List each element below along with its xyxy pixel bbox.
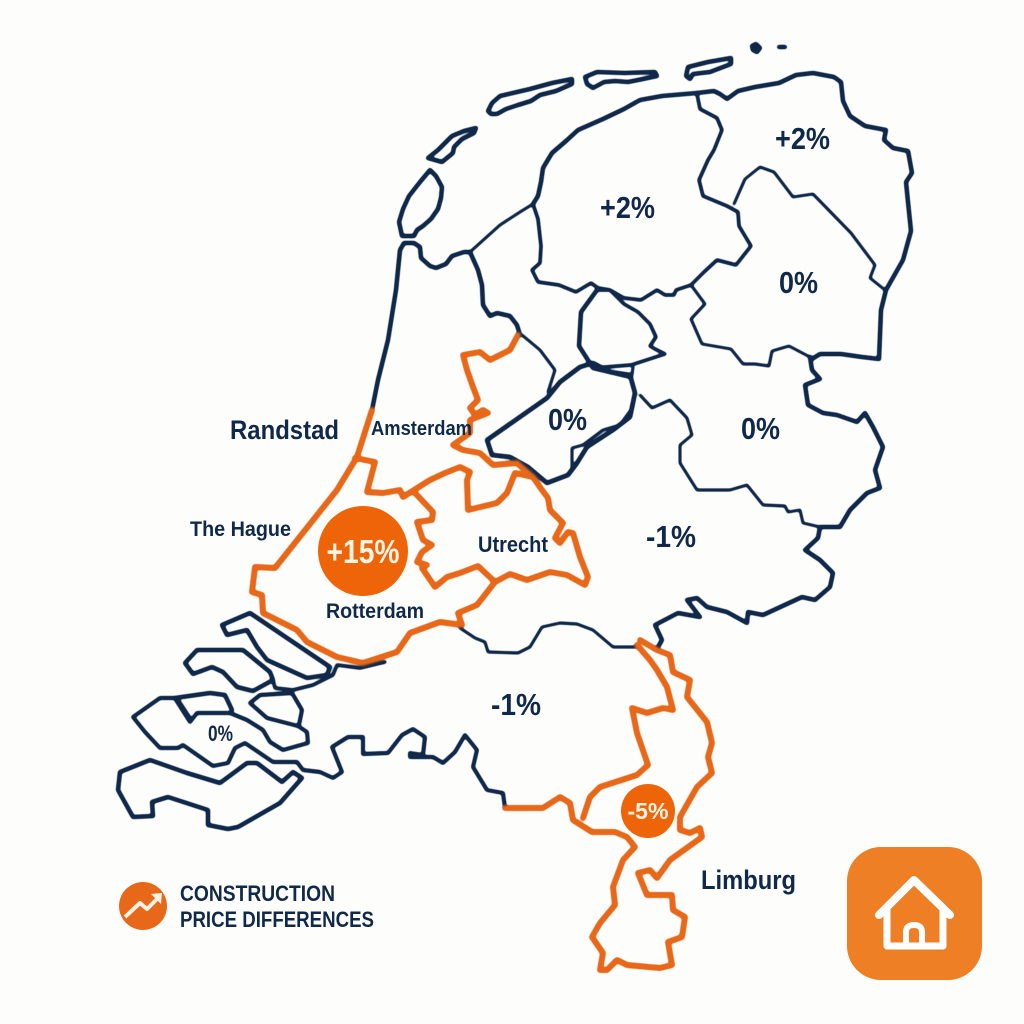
callout: -5% badge: -5% xyxy=(628,798,668,824)
icon: house tile xyxy=(847,847,982,980)
value: groningen: +2% xyxy=(775,121,830,156)
legend text: CONSTRUCTION xyxy=(180,881,335,906)
drenthe border xyxy=(734,167,885,290)
legend text: PRICE DIFFERENCES xyxy=(180,907,374,932)
afsluitdijk xyxy=(470,204,533,252)
value: flevoland: 0% xyxy=(548,402,587,437)
randstad region outline xyxy=(252,335,588,663)
value: zeeland: 0% xyxy=(208,721,233,746)
label: Randstad: Randstad xyxy=(230,415,339,445)
label: The Hague: The Hague xyxy=(190,518,291,541)
north holland coast xyxy=(372,243,520,410)
callout: +15% badge: +15% xyxy=(326,533,400,570)
callout: -5% badge xyxy=(621,784,675,838)
legend xyxy=(119,881,374,932)
gelderland border xyxy=(640,395,820,527)
value: gelderland: -1% xyxy=(646,519,696,554)
limburg region outline xyxy=(505,640,712,970)
value: friesland: +2% xyxy=(600,190,655,225)
label: Limburg: Limburg xyxy=(701,865,796,895)
friesland outline xyxy=(533,93,697,204)
legend text xyxy=(180,881,374,932)
southern border xyxy=(460,623,637,653)
label: Rotterdam: Rotterdam xyxy=(326,600,424,623)
callout: +15% badge xyxy=(318,506,408,596)
noordoostpolder xyxy=(579,290,631,377)
value: drenthe: 0% xyxy=(779,265,818,300)
flevoland side lines xyxy=(572,407,633,467)
overijssel border xyxy=(691,285,808,366)
value: overijssel: 0% xyxy=(741,411,780,446)
map: netherlands regions xyxy=(118,44,912,970)
wadden islands xyxy=(399,44,785,236)
south coast and zeeland xyxy=(118,613,505,829)
label: Utrecht: Utrecht xyxy=(478,532,549,557)
groningen and east coast xyxy=(655,73,912,647)
icon: trend arrow xyxy=(119,882,167,930)
label: Amsterdam: Amsterdam xyxy=(371,418,472,440)
value: north brabant: -1% xyxy=(491,687,541,722)
flevoland xyxy=(487,363,635,483)
